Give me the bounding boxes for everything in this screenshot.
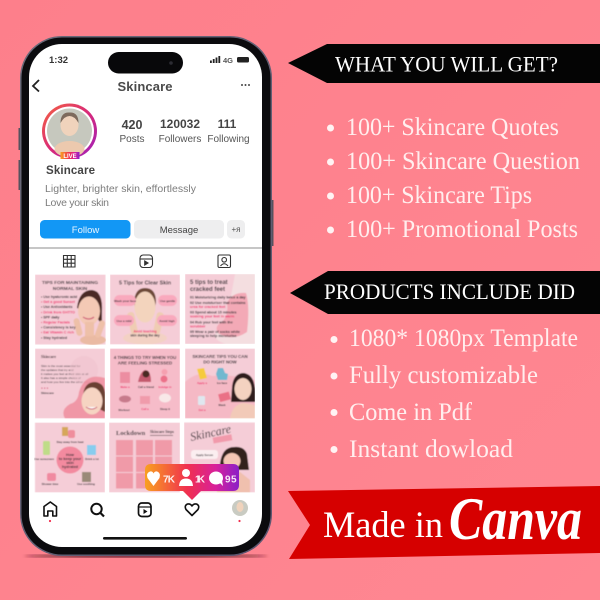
post 1: tips for normal skin: • Stay hydrated (41, 336, 67, 340)
post 5: things to try when stressed: ARE FEELING STRESSED (118, 360, 172, 366)
message button: Message (160, 225, 198, 236)
post 6: skincare tips you can do right now (185, 348, 255, 418)
header: back, title, menu: Skincare (118, 79, 172, 94)
profile stats (119, 117, 250, 145)
list: products: Fully customizable (349, 362, 538, 389)
post 6: skincare tips you can do right now: Mask (218, 403, 226, 407)
post 6: skincare tips you can do right now: DO RIGHT NOW (203, 360, 238, 364)
post 7: how to keep your skin hydrated: Stay away from heat (56, 440, 84, 444)
profile bio: Skincare (46, 165, 95, 177)
ribbon: made in canva (288, 486, 600, 559)
engagement badge: likes, followers, comments: 95 (225, 474, 237, 486)
ribbon: made in canva: Made in (323, 505, 443, 546)
post 6: skincare tips you can do right now: SKINCARE TIPS YOU CAN (192, 354, 248, 359)
post 6: skincare tips you can do right now: Ice face (217, 381, 228, 385)
post 5: things to try when stressed: Workout (118, 408, 130, 412)
post 8: lockdown grid (109, 422, 180, 492)
post 5: things to try when stressed: Make a (120, 385, 130, 389)
follow button: Follow (72, 225, 99, 236)
post 4: skincare note: It also has a simple choice of (41, 376, 81, 380)
post 3: tips to treat cracked feet: sleeping to help moisturise (190, 334, 237, 338)
header: back, title, menu (33, 79, 250, 94)
post 4: skincare note: the updates that try and (41, 368, 74, 372)
profile bio (45, 165, 197, 209)
post 2: five tips for clear skin (110, 274, 180, 344)
post 2: five tips for clear skin: Wash your face (114, 299, 136, 303)
post 5: things to try when stressed: Call a friend (138, 385, 154, 389)
engagement badge: likes, followers, comments: 1K (195, 474, 206, 486)
post 7: how to keep your skin hydrated: skin (66, 461, 74, 465)
profile stats: 420 (122, 118, 142, 132)
post 1: tips for normal skin: • Get a good Sunset (41, 300, 76, 304)
profile bio: Love your skin (45, 197, 109, 209)
post 3: tips to treat cracked feet: cracked feet (190, 287, 225, 293)
profile tab icons (64, 255, 230, 268)
post 5: things to try when stressed (110, 348, 180, 418)
post 4: skincare note: Skincare (41, 391, 54, 395)
list: what you get: 100+ Skincare Tips (346, 182, 532, 209)
post 3: tips to treat cracked feet: urea for cracked feet (190, 305, 226, 309)
banner: what you will get: WHAT YOU WILL GET? (335, 52, 558, 76)
post 2: five tips for clear skin: skin during the day (130, 334, 160, 338)
engagement badge: likes, followers, comments: 7K (163, 474, 176, 486)
post 3: tips to treat cracked feet: soaking your feet in warm (190, 314, 234, 318)
post 1: tips for normal skin: • Eat Vitamin C rich (41, 330, 74, 334)
status bar: 1:32 (49, 55, 68, 66)
banner: products include (290, 271, 600, 314)
post 6: skincare tips you can do right now: Apply a (197, 381, 207, 385)
banner: products include: PRODUCTS INCLUDE DID (324, 279, 575, 304)
bottom navigation icons (44, 500, 248, 522)
post 1: tips for normal skin: • Regular Facials (41, 320, 70, 324)
post 9: skincare script card: Skincare (189, 421, 233, 444)
profile stats: Posts (119, 134, 145, 145)
list: products (330, 325, 578, 463)
list: what you get: 100+ Skincare Question (346, 148, 580, 175)
post 4: skincare note: Skincare (41, 354, 56, 359)
post 3: tips to treat cracked feet: 03 Spend about 15 minutes (190, 310, 237, 314)
post 4: skincare note (35, 348, 105, 418)
post 1: tips for normal skin: NORMAL SKIN (53, 286, 88, 292)
post 1: tips for normal skin: • SPF daily (41, 316, 59, 320)
post 2: five tips for clear skin: 5 Tips for Clear Skin (119, 280, 171, 286)
profile avatar with live badge: LIVE (63, 154, 77, 160)
post 1: tips for normal skin (35, 274, 106, 345)
post 1: tips for normal skin: • Use Antioxidants (41, 305, 72, 309)
post 3: tips to treat cracked feet: scrubber (190, 324, 206, 328)
post 2: five tips for clear skin: Avoid high (159, 319, 175, 323)
profile stats: 111 (218, 117, 237, 131)
post 7: how to keep your skin hydrated: hydrated (62, 465, 79, 469)
post 6: skincare tips you can do right now: Get a (198, 408, 206, 412)
banner: what you will get (288, 44, 600, 83)
home indicator (103, 537, 187, 540)
phone screen (29, 44, 262, 547)
post 4: skincare note: and how you live into the other side (41, 380, 90, 384)
post 7: how to keep your skin hydrated: Use sunscreen (34, 457, 54, 461)
post 3: tips to treat cracked feet (185, 274, 255, 344)
post 1: tips for normal skin: • Use hyaluronic acid (41, 295, 77, 299)
list: products: 1080* 1080px Template (349, 325, 578, 352)
post 2: five tips for clear skin: Use a mild (116, 319, 132, 323)
phone mockup (18, 36, 274, 558)
post 3: tips to treat cracked feet: 02 Use moisturiser that contains (190, 301, 246, 305)
post 7: how to keep your skin hydrated: Use soothing (77, 482, 95, 486)
post 9: skincare script card: Apply Serum (196, 453, 214, 457)
list: what you get: 100+ Skincare Quotes (346, 114, 559, 141)
post 9: skincare script card (184, 421, 255, 492)
post 8: lockdown grid: Lockdown (116, 430, 146, 437)
add person button: +ᴙ (231, 225, 241, 234)
post 5: things to try when stressed: Call a (141, 407, 149, 411)
post 7: how to keep your skin hydrated (34, 422, 105, 492)
post 3: tips to treat cracked feet: 5 tips to treat (190, 280, 228, 286)
post 7: how to keep your skin hydrated: to keep your (59, 457, 82, 461)
post 1: tips for normal skin: • Consistency is key (41, 326, 76, 330)
profile avatar with live badge (42, 104, 97, 160)
profile stats: 120032 (160, 117, 200, 131)
post 1: tips for normal skin: TIPS FOR MAINTAINING (42, 280, 98, 286)
post 4: skincare note: ● ● ● (41, 386, 48, 390)
post 5: things to try when stressed: Sleep it (160, 407, 170, 411)
list: what you get: 100+ Promotional Posts (346, 216, 578, 243)
list: products: Instant dowload (349, 436, 514, 463)
message button (134, 220, 224, 238)
profile stats: Followers (159, 134, 201, 145)
post 2: five tips for clear skin: Avoid touching (133, 330, 157, 334)
post 4: skincare note: Skin is the most essential for (41, 364, 80, 368)
post 7: how to keep your skin hydrated: Drink a lot (85, 457, 99, 461)
profile bio: Lighter, brighter skin, effortlessly (45, 183, 197, 195)
status bar: 4G (223, 56, 233, 65)
post 7: how to keep your skin hydrated: Shower time (42, 482, 59, 486)
list: products: Come in Pdf (349, 399, 473, 426)
list: what you get (327, 114, 580, 243)
post 2: five tips for clear skin: Use gentle (160, 299, 175, 303)
status bar (49, 52, 249, 74)
post 1: tips for normal skin: • Drink from GHTTO (41, 310, 75, 314)
add person button (227, 220, 245, 238)
post 3: tips to treat cracked feet: 05 Wear a pair of socks while (190, 330, 240, 334)
post 3: tips to treat cracked feet: 01 Moisturizing daily twice a day (190, 296, 246, 300)
post 8: lockdown grid: Skincare Steps (150, 430, 174, 434)
post 5: things to try when stressed: 4 THINGS TO TRY WHEN YOU (114, 355, 176, 360)
post 5: things to try when stressed: Indulge in (158, 385, 172, 389)
post 7: how to keep your skin hydrated: How (66, 453, 74, 457)
post 4: skincare note: it makes you feel at their skin at all (41, 372, 89, 376)
follow button (40, 220, 130, 238)
profile stats: Following (207, 134, 250, 145)
post 3: tips to treat cracked feet: 04 Rub your feet with the (190, 320, 233, 324)
engagement badge: likes, followers, comments (145, 464, 239, 500)
